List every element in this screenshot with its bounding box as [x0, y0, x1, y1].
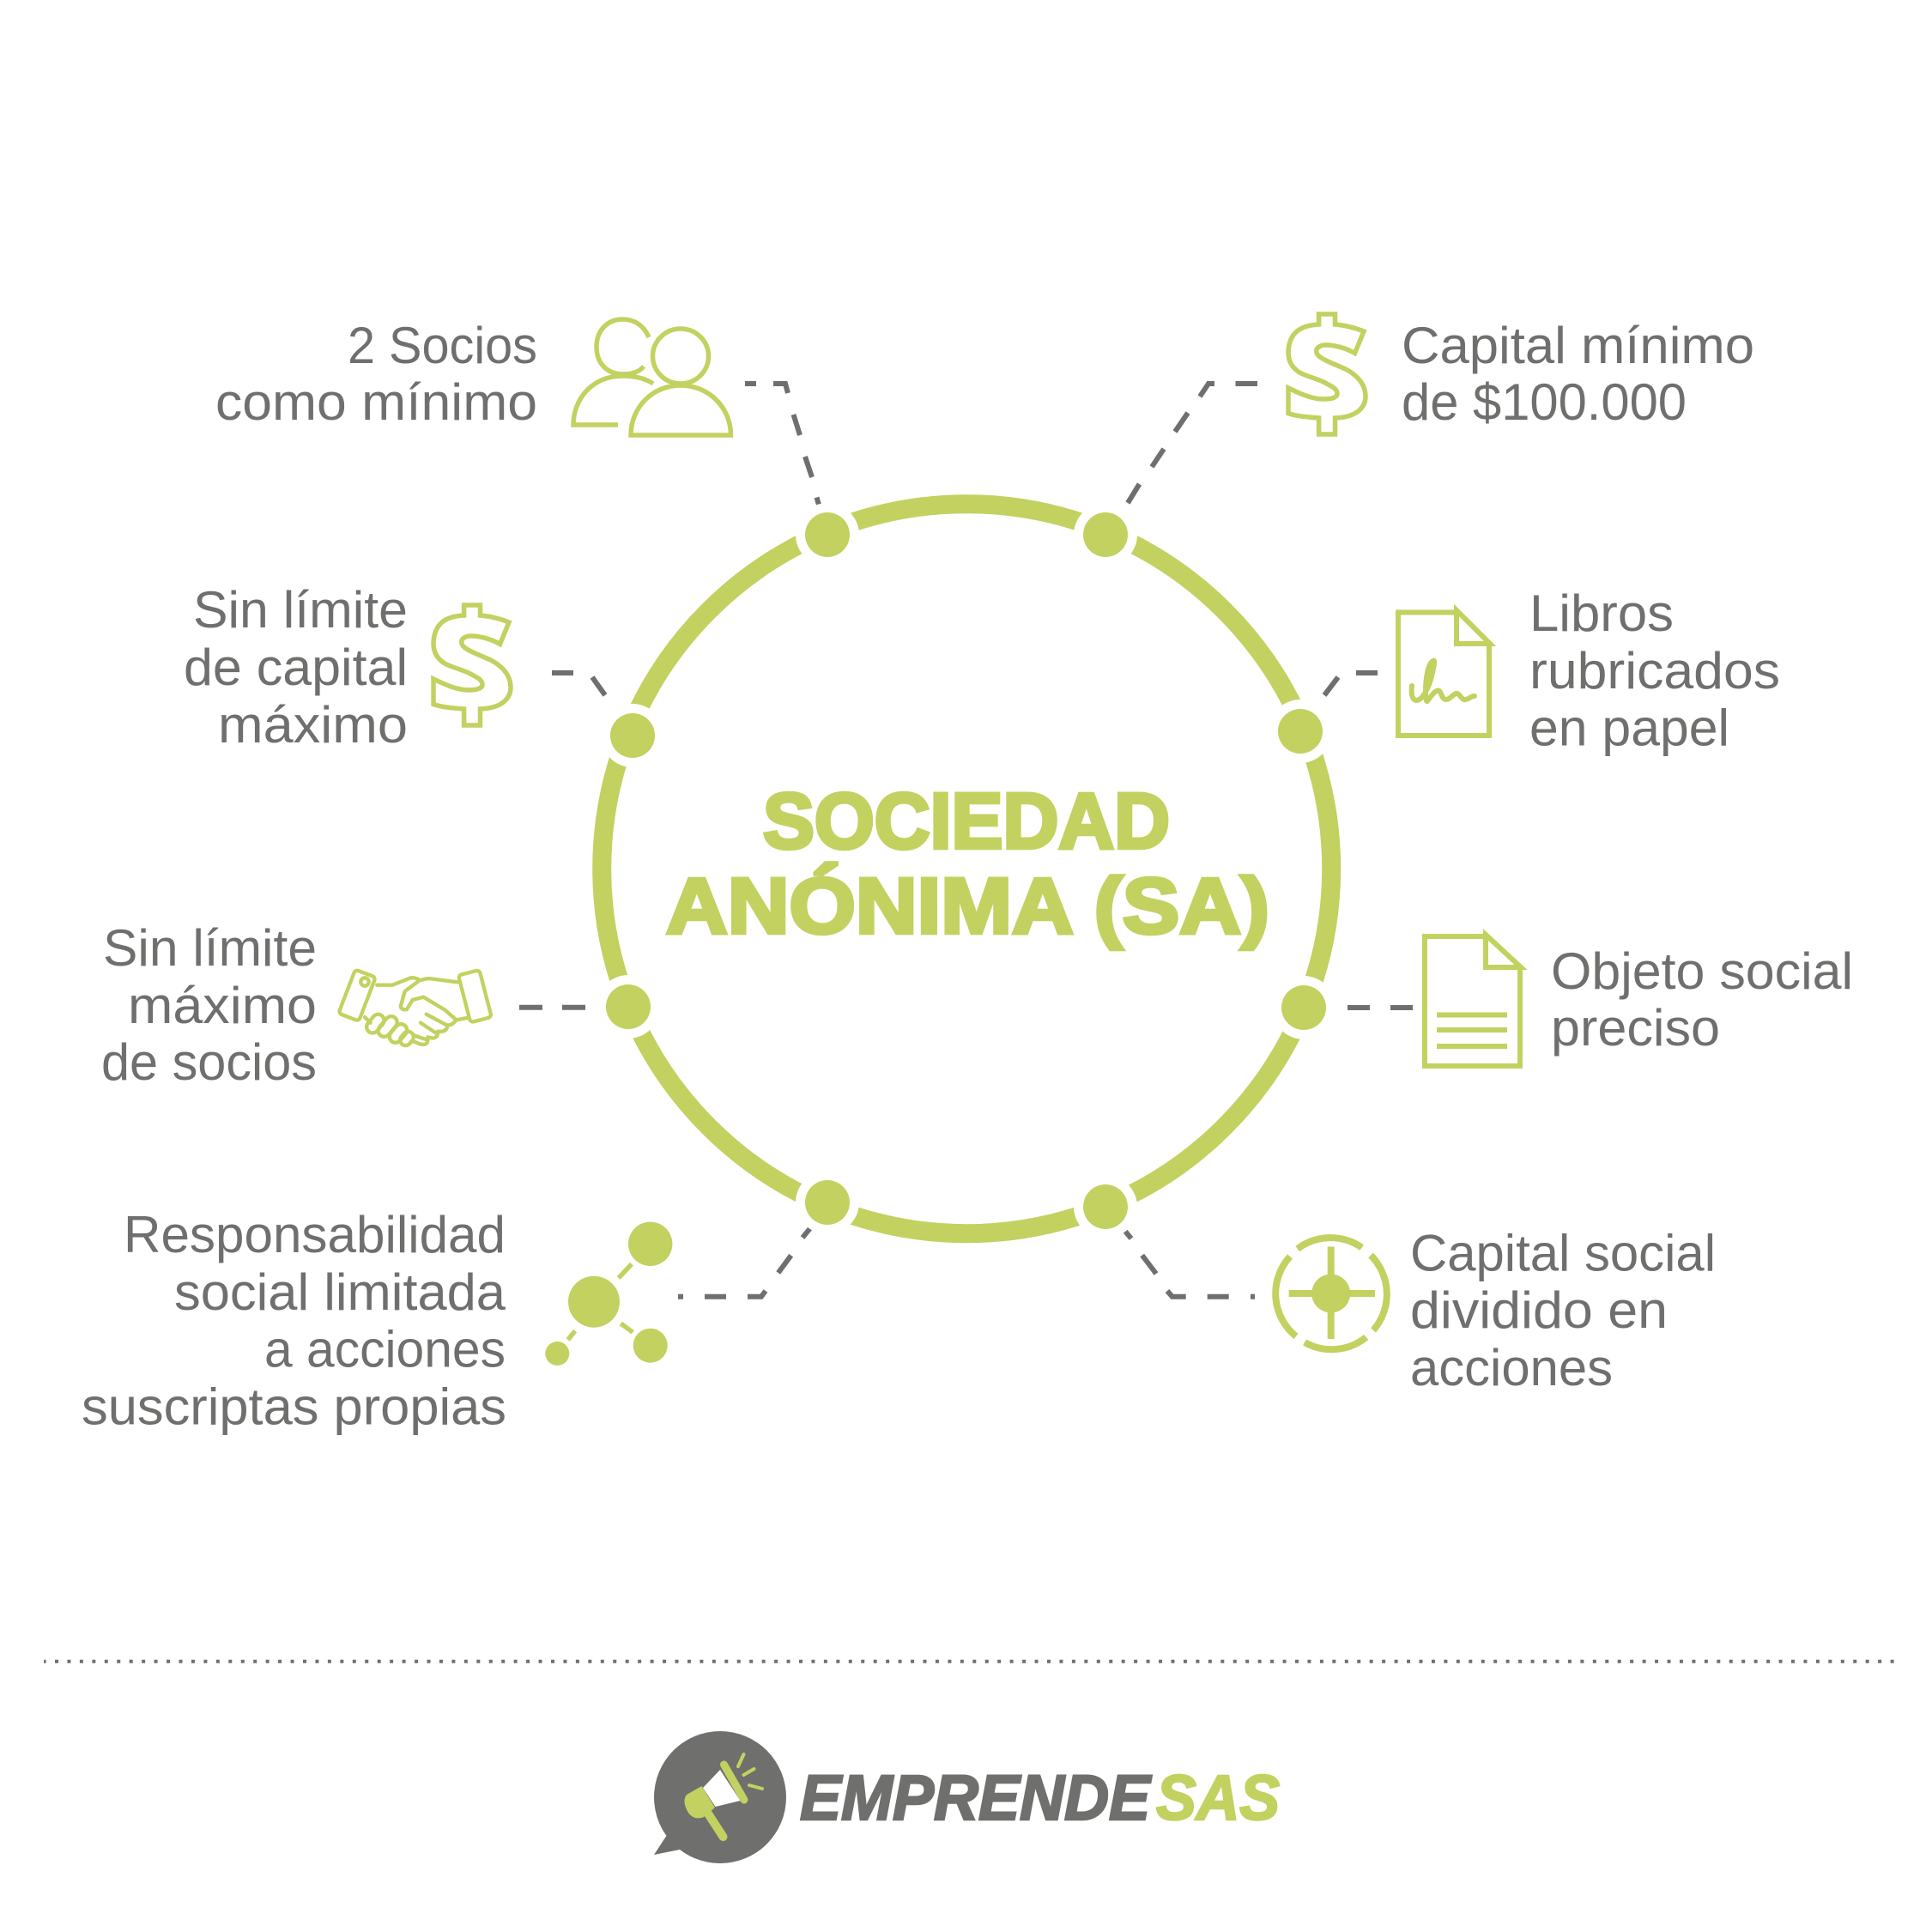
connector	[1324, 673, 1378, 695]
node	[1074, 503, 1137, 566]
text: capital social dividido en acciones: acciones	[1410, 1339, 1613, 1396]
text: libros rubricados en papel: rubricados	[1529, 642, 1780, 700]
text: capital social dividido en acciones: Capital social	[1410, 1224, 1716, 1282]
text: sin límite máximo de socios: de socios	[101, 1033, 317, 1091]
icon: molecule	[545, 1222, 672, 1366]
panel: objeto social	[1272, 935, 1853, 1066]
panel: 2 socios	[215, 317, 859, 566]
panel: sin límite de capital	[184, 581, 664, 767]
connector	[678, 1228, 810, 1297]
node	[1272, 976, 1335, 1039]
logo	[654, 1731, 1280, 1863]
text: 2 socios como mínimo: como mínimo	[215, 373, 537, 431]
logo text: EMPRENDE: EMPRENDE	[800, 1762, 1153, 1833]
text: sin límite de capital máximo: Sin límite	[193, 581, 408, 639]
connector	[519, 1005, 585, 1010]
panel: libros rubricados	[1269, 584, 1780, 763]
icon: dollar sign	[433, 605, 511, 725]
panel: capital social	[1074, 1175, 1716, 1396]
text: objeto social preciso: Objeto social	[1551, 942, 1853, 1000]
node	[601, 704, 664, 767]
text: responsabilidad social limitada	[82, 1206, 506, 1435]
text: sin límite de capital máximo	[184, 581, 408, 754]
text: objeto social preciso	[1551, 942, 1853, 1057]
node	[796, 503, 859, 566]
logo text: SAS: SAS	[1156, 1762, 1280, 1833]
text: 2 socios como mínimo: 2 Socios	[348, 317, 537, 374]
text: sin límite de capital máximo: de capital	[184, 639, 408, 696]
panel: sin límite de socios	[101, 919, 660, 1091]
text: 2 socios como mínimo	[215, 317, 537, 431]
text: sin límite máximo de socios: máximo	[128, 977, 317, 1034]
text: capital social dividido en acciones	[1410, 1224, 1716, 1396]
title	[666, 778, 1269, 950]
central ring	[602, 504, 1331, 1233]
connector	[552, 673, 605, 695]
text: responsabilidad social limitada: social limitada	[174, 1263, 506, 1321]
text: responsabilidad social limitada: a acciones	[264, 1320, 506, 1378]
text: sin límite máximo de socios: Sin límite	[103, 919, 317, 977]
text: sin límite de capital máximo: máximo	[218, 696, 408, 754]
text: sin límite máximo de socios	[101, 919, 317, 1091]
text: capital social dividido en acciones: dividido en	[1410, 1281, 1668, 1339]
text: capital mínimo de $100.000: de $100.000	[1402, 373, 1687, 431]
text: libros rubricados en papel	[1529, 584, 1780, 757]
text: capital mínimo de $100.000	[1402, 317, 1754, 431]
node	[1074, 1175, 1137, 1239]
connector	[745, 384, 819, 505]
icon: handshake	[338, 970, 492, 1048]
text: libros rubricados en papel: Libros	[1529, 584, 1674, 642]
text: capital mínimo de $100.000: Capital mínimo	[1402, 317, 1754, 374]
panel: responsabilidad limitada	[82, 1171, 859, 1435]
title: ANÓNIMA (SA)	[666, 862, 1269, 950]
node	[1269, 700, 1332, 763]
text: responsabilidad social limitada: suscriptas propias	[82, 1378, 506, 1435]
icon: two people	[573, 319, 731, 435]
icon: speech bubble megaphone	[654, 1731, 786, 1863]
icon: target	[1275, 1238, 1387, 1349]
connector	[1128, 384, 1257, 503]
connector	[1125, 1232, 1255, 1297]
connector	[1348, 1005, 1413, 1010]
icon: signed document	[1398, 610, 1490, 736]
node	[796, 1171, 859, 1234]
icon: dollar sign	[1288, 314, 1366, 434]
node	[597, 975, 660, 1039]
text: libros rubricados en papel: en papel	[1529, 699, 1729, 757]
panel: capital mínimo	[1074, 314, 1754, 566]
title: SOCIEDAD	[763, 778, 1170, 865]
text: responsabilidad social limitada: Responsabilidad	[124, 1206, 506, 1263]
text: objeto social preciso: preciso	[1551, 999, 1720, 1057]
icon: document with lines	[1425, 935, 1521, 1066]
